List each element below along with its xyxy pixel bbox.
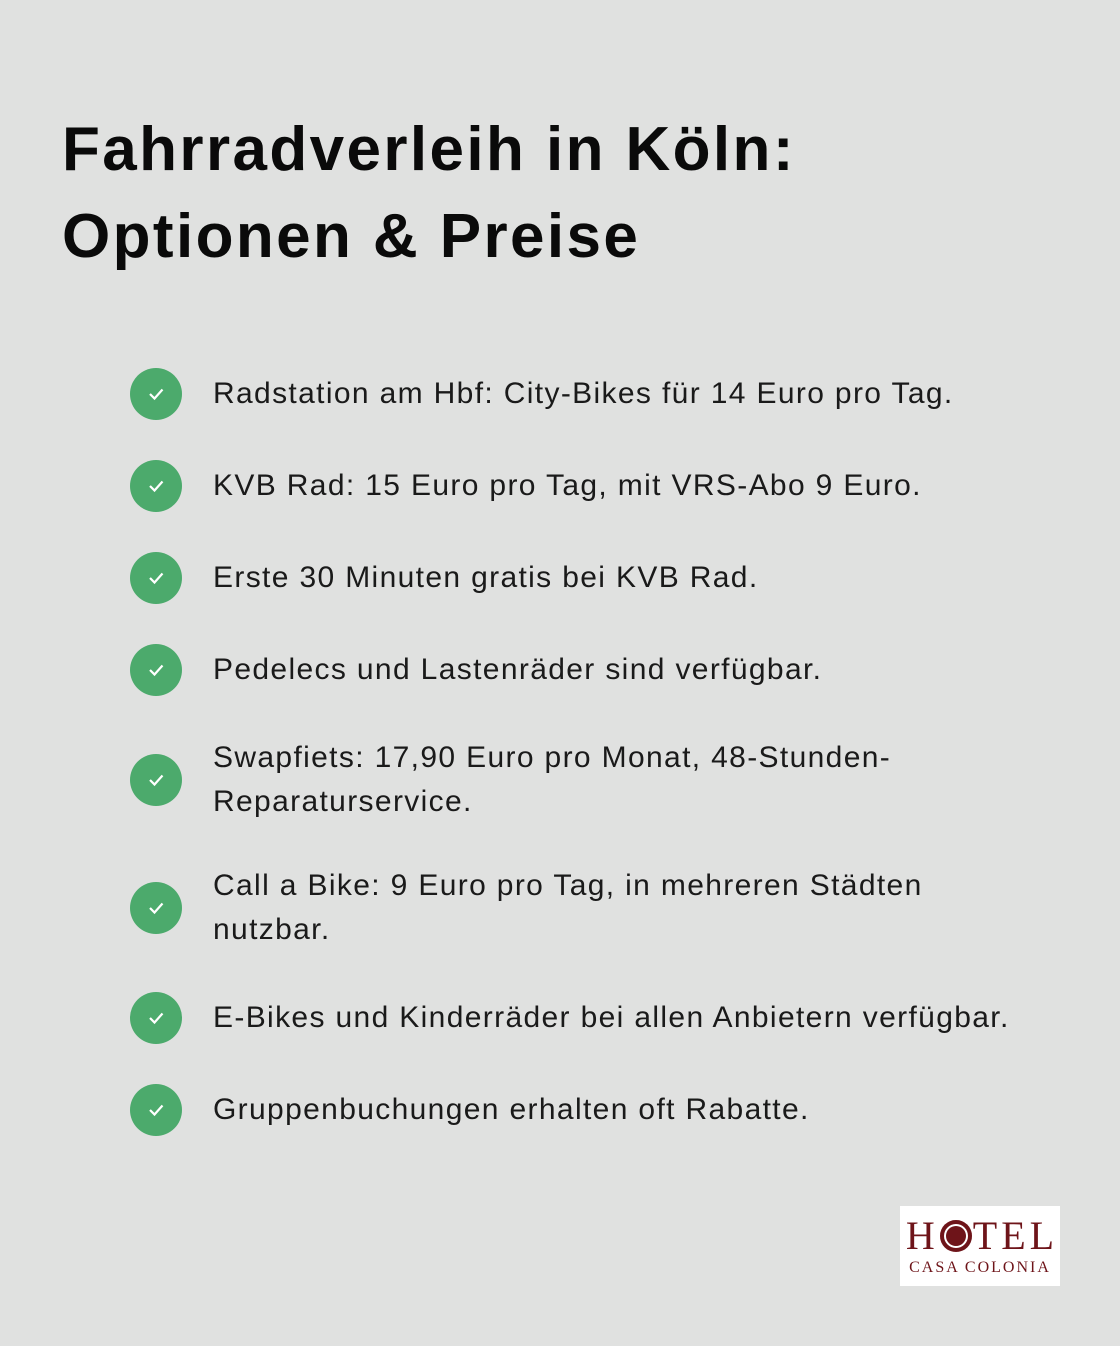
logo: CASA COLONIA [909,1259,1051,1276]
item 7: E-Bikes und Kinderräder bei allen Anbietern verfügbar. [213,1001,1010,1034]
item 3: Erste 30 Minuten gratis bei KVB Rad. [213,561,759,594]
item 8: Gruppenbuchungen erhalten oft Rabatte. [213,1093,810,1126]
item 4: Pedelecs und Lastenräder sind verfügbar. [213,653,822,686]
item 5 [130,741,891,818]
title: Fahrradverleih in Köln: [62,115,796,184]
item 6 [130,869,923,946]
item 5: Swapfiets: 17,90 Euro pro Monat, 48-Stunden- [213,741,891,774]
item 7 [130,992,1010,1044]
item 5: Reparaturservice. [213,785,473,818]
item 3 [130,552,759,604]
item 2 [130,460,922,512]
item 6: nutzbar. [213,913,331,946]
item 1 [130,368,954,420]
item 4 [130,644,822,696]
logo: H TEL [906,1213,1058,1258]
logo [900,1206,1060,1286]
title: Optionen & Preise [62,202,640,271]
title [62,115,796,271]
item 2: KVB Rad: 15 Euro pro Tag, mit VRS-Abo 9 Euro. [213,469,922,502]
item 1: Radstation am Hbf: City-Bikes für 14 Euro pro Tag. [213,377,954,410]
item 8 [130,1084,810,1136]
item 6: Call a Bike: 9 Euro pro Tag, in mehreren Städten [213,869,923,902]
